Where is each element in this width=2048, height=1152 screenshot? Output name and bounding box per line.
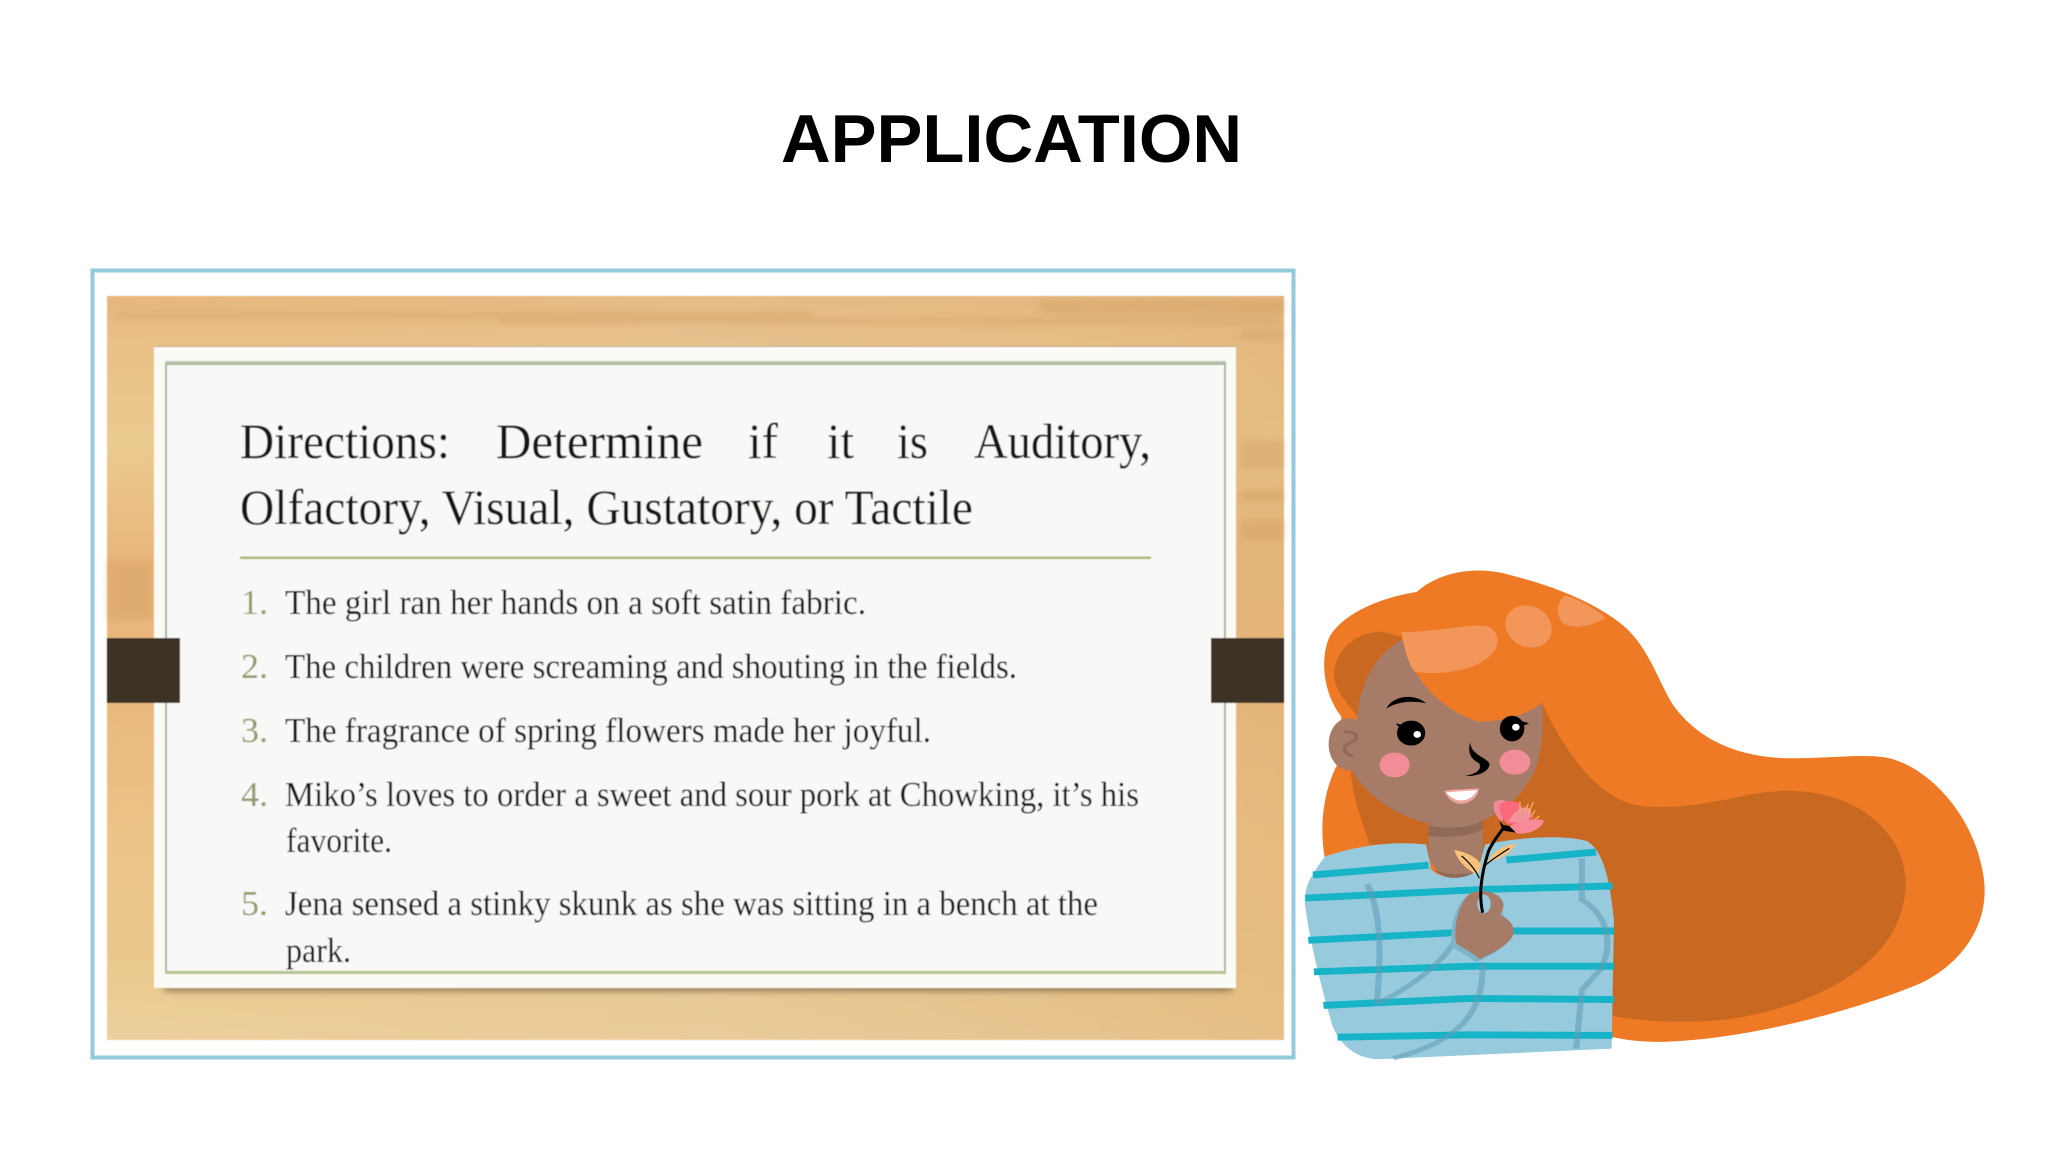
paper shadow (164, 982, 1232, 991)
hair shadow behind face (1334, 632, 1403, 716)
ear (1329, 718, 1368, 770)
nose (1465, 742, 1489, 776)
stem (1481, 828, 1503, 913)
item 5: 5. (241, 884, 268, 923)
mouth (1444, 788, 1479, 804)
left eye (1396, 721, 1425, 746)
item 3: The fragrance of spring flowers made her joyful. (285, 711, 931, 750)
illustration: girl smelling flower (1305, 570, 1985, 1059)
item 5: park. (286, 931, 351, 970)
hair highlights (1402, 595, 1605, 673)
directions heading: if (748, 413, 778, 469)
eyebrow (1387, 697, 1426, 709)
sweater folds (1367, 858, 1607, 1058)
sweater (1305, 837, 1614, 1059)
bangs (1402, 575, 1610, 722)
directions heading: is (897, 413, 928, 469)
item 5 (241, 884, 1098, 970)
item 2: 2. (241, 647, 268, 686)
right clip (1211, 638, 1284, 703)
item 4: 4. (241, 775, 268, 814)
hand (1455, 891, 1514, 959)
leaves (1454, 844, 1516, 878)
directions heading: Directions: (240, 413, 450, 469)
item 4: favorite. (286, 821, 392, 860)
directions heading: Olfactory, Visual, Gustatory, or Tactile (240, 479, 973, 535)
face (1351, 626, 1543, 827)
directions heading: Auditory, (974, 413, 1151, 469)
item 1: The girl ran her hands on a soft satin fabric. (285, 583, 866, 622)
sweater stripes (1305, 852, 1614, 1037)
blossom (1494, 800, 1544, 834)
item 2: The children were screaming and shouting in the fields. (285, 647, 1017, 686)
question list (241, 583, 1139, 970)
right eye (1500, 716, 1529, 741)
hand and flower (1451, 800, 1544, 963)
item 1: 1. (241, 583, 268, 622)
title: APPLICATION (781, 101, 1242, 177)
cheeks (1380, 750, 1530, 777)
directions heading (240, 413, 1151, 535)
panel: wood board (107, 296, 1284, 1040)
item 4 (241, 775, 1139, 860)
finger gap (1477, 895, 1491, 913)
item 5: Jena sensed a stinky skunk as she was sitting in a bench at the (285, 884, 1098, 923)
wood grain streaks (107, 300, 1284, 620)
hair back (1322, 570, 1985, 1042)
directions heading: Determine (496, 413, 703, 469)
hair shadow (1351, 703, 1906, 1022)
hand shadow (1451, 894, 1510, 963)
panel: photo frame (92, 270, 1294, 1058)
item 4: Miko’s loves to order a sweet and sour pork at Chowking, it’s his (285, 775, 1139, 814)
left clip (107, 638, 180, 703)
directions heading: it (827, 413, 854, 469)
neck (1429, 820, 1483, 879)
paper card (154, 346, 1236, 988)
item 3: 3. (241, 711, 268, 750)
